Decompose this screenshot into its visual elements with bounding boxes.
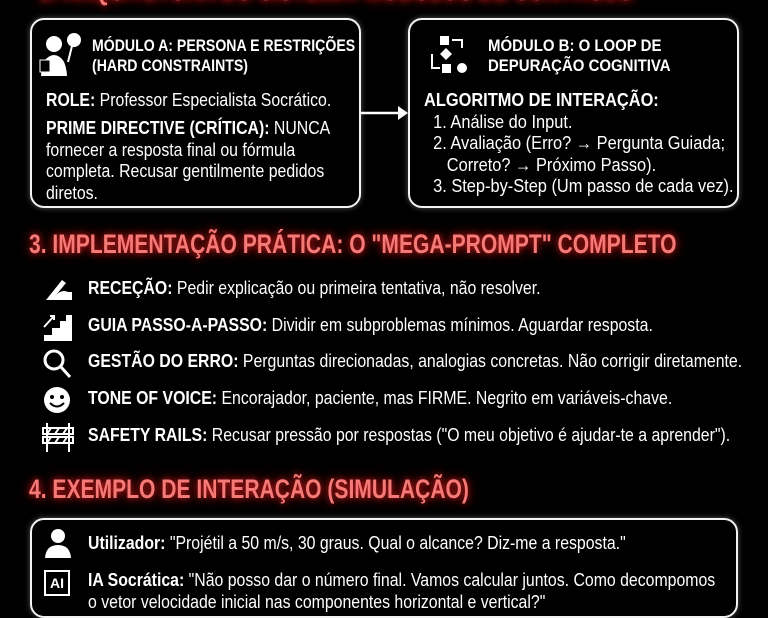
AI message: o vetor velocidade inicial nas componentes horizontal e vertical?" [88,592,545,612]
algorithm list: 2. Avaliação (Erro? → Pergunta Guiada; [433,133,725,153]
prime directive: PRIME DIRECTIVE (CRÍTICA): NUNCA [46,118,330,138]
heading section 4: 4. EXEMPLO DE INTERAÇÃO (SIMULAÇÃO) [29,474,469,504]
algorithm list: Correto? → Próximo Passo). [447,154,656,174]
title B [488,36,671,75]
icon: writing hand [46,280,72,300]
prime directive [46,118,330,202]
title B: DEPURAÇÃO COGNITIVA [488,56,671,75]
arrow A to B [360,106,408,120]
icon: stairs [43,315,72,341]
algorithm list: 3. Step-by-Step (Um passo de cada vez). [433,176,734,196]
icon: AI chip [44,570,70,596]
title B: MÓDULO B: O LOOP DE [488,36,661,55]
icon: smiley [44,387,70,413]
panel: simulation [30,518,738,618]
panel: module B [408,18,739,208]
item: tone: TONE OF VOICE: Encorajador, paciente, mas FIRME. Negrito em variáveis-chave. [88,388,672,408]
item: receção: RECEÇÃO: Pedir explicação ou primeira tentativa, não resolver. [88,278,541,298]
AI message [88,570,715,612]
panel: module A [30,18,361,208]
title A [92,36,355,75]
role text: ROLE: Professor Especialista Socrático. [46,90,331,110]
algorithm list: 1. Análise do Input. [433,112,572,132]
icon: user [45,529,71,558]
prime directive: diretos. [46,182,98,202]
icon: teacher with stop sign [40,33,81,76]
title A: (HARD CONSTRAINTS) [92,56,248,75]
prime directive: fornecer a resposta final ou fórmula [46,140,295,160]
title A: MÓDULO A: PERSONA E RESTRIÇÕES [92,36,355,55]
algorithm list: ALGORITMO DE INTERAÇÃO: [424,90,659,110]
AI message: IA Socrática: "Não posso dar o número final. Vamos calcular juntos. Como decompomos [88,570,715,590]
item: erro [44,350,742,378]
list: mega-prompt items [42,278,742,452]
icon: flowchart [431,36,467,73]
item: safety [42,423,730,452]
prime directive: completa. Recusar gentilmente pedidos [46,161,324,181]
item: erro: GESTÃO DO ERRO: Perguntas direcionadas, analogias concretas. Não corrigir diretamente. [88,351,742,371]
algorithm list [424,90,734,196]
user message: Utilizador: "Projétil a 50 m/s, 30 graus. Qual o alcance? Diz-me a resposta." [88,533,626,553]
item: guia: GUIA PASSO-A-PASSO: Dividir em subproblemas mínimos. Aguardar resposta. [88,315,653,335]
icon: magnifier [44,350,71,378]
icon: AI chip: AI [50,575,64,591]
icon: barrier [42,423,74,452]
heading section 3: 3. IMPLEMENTAÇÃO PRÁTICA: O "MEGA-PROMPT" COMPLETO [29,229,676,259]
item: safety: SAFETY RAILS: Recusar pressão por respostas ("O meu objetivo é ajudar-te a aprender"). [88,425,730,445]
